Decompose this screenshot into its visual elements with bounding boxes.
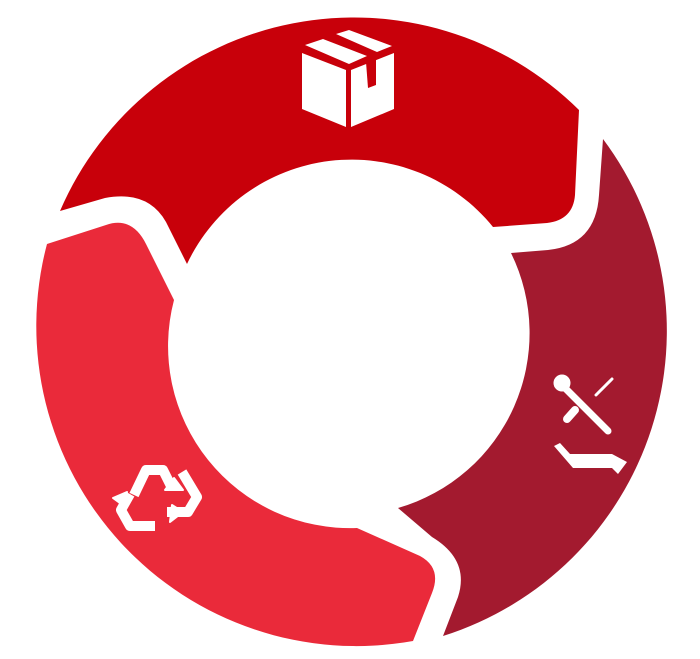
segment: top (box) xyxy=(60,17,579,264)
segment: right (tools) xyxy=(398,139,667,636)
segment: left (recycle) xyxy=(36,223,435,646)
icon: box xyxy=(302,30,394,127)
icon: recycle xyxy=(113,470,197,526)
icon: wrench and screwdriver xyxy=(554,375,627,474)
